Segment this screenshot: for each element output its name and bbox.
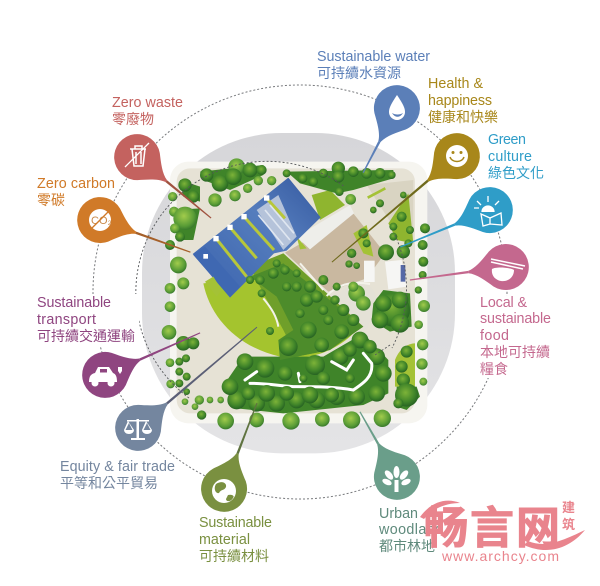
label: sustainable transport <box>34 294 139 346</box>
label: sustainable transport: Sustainable <box>37 295 111 311</box>
label: zero carbon: 零碳 <box>37 192 65 208</box>
label: sustainable water <box>317 49 430 81</box>
site plot <box>170 162 427 423</box>
inner dotted circle <box>136 161 406 398</box>
icon: crossed bin <box>125 143 149 167</box>
watermark: www.archcy.com <box>441 548 559 564</box>
label: local and sustainable food: Local & <box>480 295 527 311</box>
label: green culture: 綠色文化 <box>488 165 544 181</box>
plaza <box>285 213 385 292</box>
label: health and happiness: happiness <box>428 93 492 109</box>
pin: local and sustainable food <box>407 241 532 303</box>
label: local and sustainable food <box>476 295 556 378</box>
label: urban woodland: woodland <box>378 522 443 538</box>
label: local and sustainable food: 本地可持續 <box>480 344 550 360</box>
solar roof <box>193 178 321 298</box>
label: green culture: Green <box>488 132 526 148</box>
label: zero carbon: Zero carbon <box>37 176 115 192</box>
label: equity and fair trade <box>60 459 175 491</box>
trees <box>162 158 430 430</box>
service building <box>364 261 375 282</box>
icon: noodle bowl <box>491 259 525 281</box>
paths <box>263 263 370 327</box>
pin: zero waste <box>105 125 226 236</box>
pin: sustainable material <box>194 395 278 519</box>
icon: water drop <box>389 95 405 120</box>
label: sustainable transport: transport <box>37 312 96 328</box>
watermark: 畅言网 <box>424 492 560 556</box>
label: sustainable water: 可持續水資源 <box>317 65 401 81</box>
label: health and happiness: Health & <box>428 76 483 92</box>
icon: smiley <box>446 145 468 167</box>
pin: sustainable water <box>343 77 428 183</box>
watermark: 建 <box>562 497 575 516</box>
label: health and happiness: 健康和快樂 <box>428 109 498 125</box>
pin: health and happiness <box>317 124 489 280</box>
label: local and sustainable food: 糧食 <box>480 361 508 377</box>
east lawn strip <box>395 343 415 387</box>
label: local and sustainable food: food <box>480 328 509 344</box>
label: urban woodland: Urban <box>379 506 418 522</box>
pin: green culture <box>392 180 520 268</box>
label: sustainable water: Sustainable water <box>317 49 430 65</box>
label: zero waste: Zero waste <box>112 95 183 111</box>
pin: equity and fair trade <box>106 310 272 460</box>
icon: electric car <box>89 367 122 386</box>
label: sustainable material: Sustainable <box>199 515 272 531</box>
site plan aerial <box>142 133 455 453</box>
label: green culture: culture <box>488 149 532 165</box>
label: zero waste <box>112 95 183 127</box>
label: urban woodland: 都市林地 <box>379 538 435 554</box>
woodland trees upper <box>242 346 418 408</box>
outer dotted orbit <box>93 85 507 499</box>
label: zero carbon <box>37 176 115 208</box>
label: health and happiness <box>428 76 498 125</box>
label: sustainable material: material <box>199 532 250 548</box>
woodland clearings <box>245 353 372 390</box>
label: equity and fair trade: Equity & fair trade <box>60 459 175 475</box>
icon: sun and book <box>474 196 502 226</box>
lawn <box>203 253 353 358</box>
label: sustainable material: 可持續材料 <box>199 548 269 564</box>
tree masses <box>173 165 420 413</box>
icon: tree <box>381 466 412 492</box>
green roof wing <box>312 190 345 220</box>
pin: sustainable transport <box>75 312 209 405</box>
icon: globe <box>212 479 236 503</box>
label: equity and fair trade: 平等和公平貿易 <box>60 475 158 491</box>
label: sustainable transport: 可持續交通運輸 <box>37 328 135 344</box>
icon: crossed CO2 <box>89 209 112 231</box>
icon: scales <box>124 419 152 440</box>
label: sustainable material <box>199 515 272 564</box>
grey backdrop <box>142 133 455 453</box>
label: zero waste: 零廢物 <box>112 111 154 127</box>
label: local and sustainable food: sustainable <box>480 311 551 327</box>
watermark: 筑 <box>562 514 575 533</box>
icon: crossed CO2: CO₂ <box>91 215 112 227</box>
pin: zero carbon <box>71 191 198 274</box>
pin: urban woodland <box>340 400 428 508</box>
label: green culture <box>488 132 544 181</box>
label: urban woodland <box>378 506 443 554</box>
